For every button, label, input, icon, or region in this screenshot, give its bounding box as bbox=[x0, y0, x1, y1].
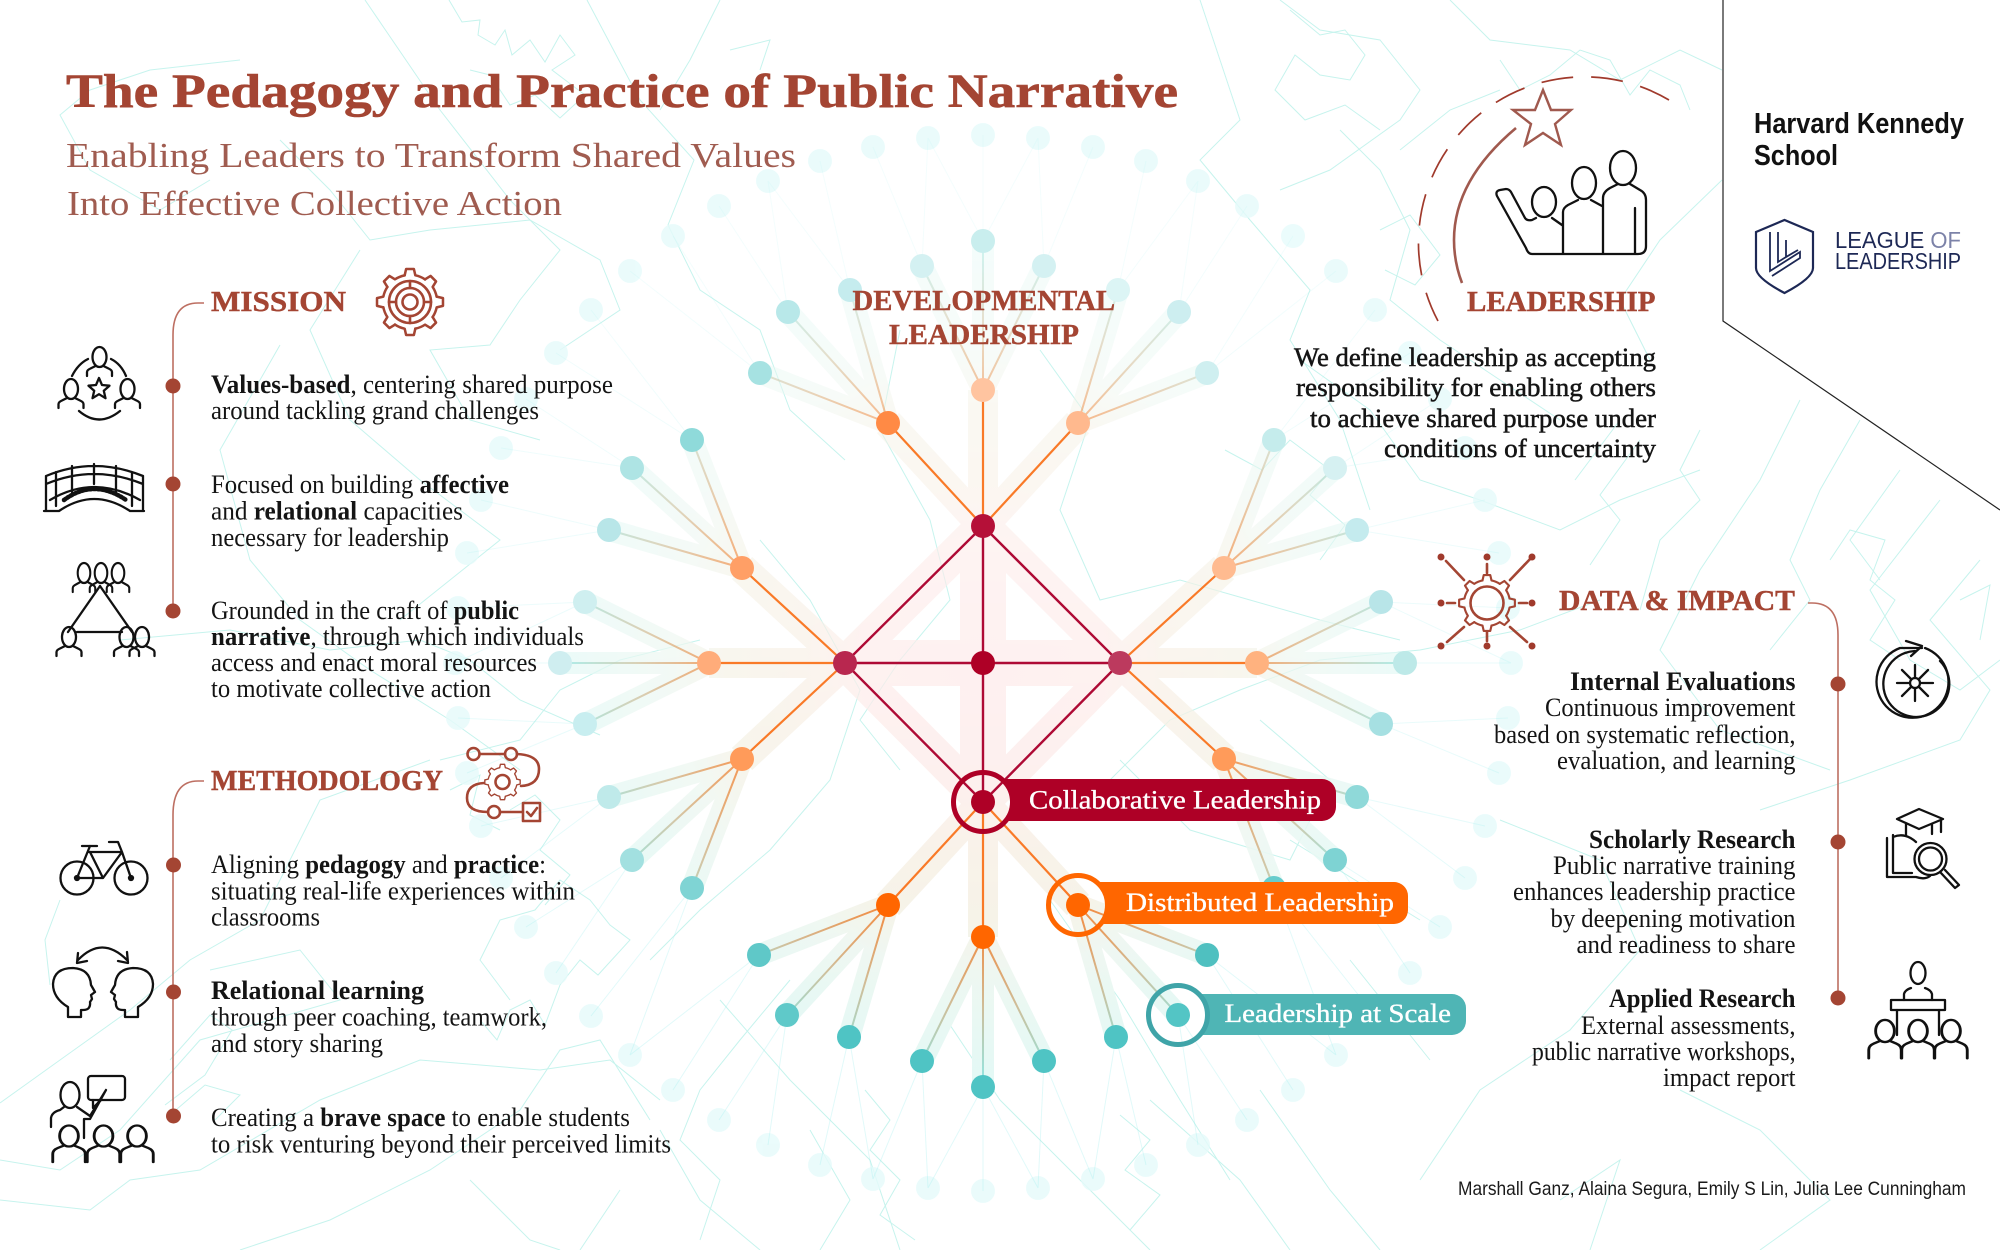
text: brave space bbox=[211, 1103, 671, 1158]
icon: teacher and students bbox=[51, 1076, 153, 1162]
panel: leadership bbox=[1294, 77, 1669, 463]
logo: League of Leadership: LEADERSHIP bbox=[1835, 248, 1961, 274]
text: internal evaluations: based on systematic reflection, bbox=[1494, 720, 1796, 749]
text: applied research: public narrative workshops, bbox=[1532, 1037, 1796, 1066]
heading: methodology: METHODOLOGY bbox=[211, 766, 443, 797]
panel: methodology bbox=[51, 748, 671, 1162]
icon: group of people bbox=[1496, 151, 1646, 254]
icon: process gear bbox=[467, 748, 540, 821]
text: leadership definition: conditions of uncertainty bbox=[1384, 434, 1656, 463]
text: scholarly research: by deepening motivation bbox=[1550, 904, 1796, 933]
legend pill: Distributed Leadership: Distributed Leadership bbox=[1126, 887, 1394, 917]
orange nodes bbox=[697, 378, 1269, 949]
pale bands bbox=[560, 241, 1405, 1087]
subtitle: Enabling Leaders to Transform Shared Values bbox=[66, 136, 796, 175]
legend pill: Collaborative Leadership: Collaborative Leadership bbox=[1029, 784, 1321, 814]
text: scholarly research: Public narrative training bbox=[1553, 851, 1796, 880]
red nodes bbox=[833, 514, 1132, 814]
text: public narrative: access and enact moral resources bbox=[211, 648, 537, 677]
heading: mission: MISSION bbox=[211, 287, 346, 318]
text: relational learning: Relational learning bbox=[211, 976, 424, 1005]
text: brave space: to risk venturing beyond their perceived limits bbox=[211, 1130, 671, 1158]
collaborative diamond connectors bbox=[845, 526, 1120, 802]
text: internal evaluations: Continuous improvement bbox=[1545, 693, 1796, 722]
text: scholarly research: enhances leadership practice bbox=[1513, 877, 1796, 906]
text: leadership definition: responsibility for enabling others bbox=[1296, 373, 1656, 402]
legend pill: Distributed Leadership bbox=[1048, 876, 1408, 934]
faint connectors to the outer ring bbox=[455, 135, 1511, 1191]
text: applied research: Applied Research bbox=[1609, 984, 1796, 1013]
text: applied research: impact report bbox=[1663, 1063, 1796, 1092]
icon: target gear bbox=[376, 268, 444, 336]
text: internal evaluations: Internal Evaluations bbox=[1570, 667, 1796, 696]
heading: leadership: LEADERSHIP bbox=[1467, 287, 1656, 318]
text: internal evaluations bbox=[1494, 667, 1796, 775]
text: pedagogy and practice: situating real-life experiences within bbox=[211, 876, 575, 906]
icon: team circle with star bbox=[58, 347, 140, 420]
heading: developmental leadership bbox=[852, 286, 1115, 351]
text: scholarly research bbox=[1513, 825, 1796, 959]
heading: developmental leadership: DEVELOPMENTAL bbox=[852, 286, 1115, 317]
icon: graduation cap, book and magnifier bbox=[1887, 809, 1959, 888]
radial network diagram bbox=[455, 135, 1511, 1191]
icon: cycle with sun bbox=[1876, 641, 1949, 718]
logo: League of Leadership: LEAGUE OF bbox=[1835, 227, 1961, 253]
outer teal nodes bbox=[548, 229, 1417, 1099]
subtitle: Into Effective Collective Action bbox=[67, 184, 562, 223]
text: pedagogy and practice: classrooms bbox=[211, 902, 320, 932]
text: public narrative: narrative, through which individuals bbox=[211, 622, 584, 651]
icon: two heads exchanging bbox=[53, 948, 153, 1017]
methodology timeline bbox=[166, 781, 204, 1124]
heading: data and impact: DATA & IMPACT bbox=[1559, 586, 1795, 617]
heading: developmental leadership: LEADERSHIP bbox=[889, 320, 1079, 351]
icon: bridge bbox=[44, 464, 144, 511]
logo: Harvard Kennedy School bbox=[1754, 108, 1964, 172]
text: leadership definition: to achieve shared purpose under bbox=[1310, 404, 1656, 433]
text: relational learning: through peer coaching, teamwork, bbox=[211, 1002, 547, 1032]
text: public narrative: to motivate collective action bbox=[211, 674, 491, 703]
icon: lecturer and audience bbox=[1869, 962, 1967, 1058]
legend pill: Leadership at Scale bbox=[1148, 986, 1466, 1044]
text: relational learning: and story sharing bbox=[211, 1029, 383, 1058]
text: pedagogy and practice: Aligning pedagogy and practice: bbox=[211, 850, 546, 879]
icon: dashed arc and star bbox=[1418, 77, 1669, 321]
legend pill: Collaborative Leadership bbox=[954, 772, 1336, 832]
text: affective capacities: Focused on building affective bbox=[211, 470, 509, 499]
red to orange connectors bbox=[709, 390, 1257, 937]
subtitle bbox=[66, 136, 796, 223]
icon: data gear with spokes bbox=[1438, 554, 1536, 650]
logo panel background bbox=[1723, 0, 2000, 510]
mission timeline bbox=[166, 303, 204, 618]
orange to teal connectors bbox=[560, 241, 1405, 1087]
text: relational learning bbox=[211, 976, 547, 1058]
logo: Harvard Kennedy School: School bbox=[1754, 140, 1838, 172]
panel: data and impact bbox=[1438, 554, 1967, 1092]
text: brave space: Creating a brave space to enable students bbox=[211, 1103, 630, 1132]
text: values-based: around tackling grand challenges bbox=[211, 396, 539, 425]
panel: mission bbox=[44, 268, 613, 703]
text: public narrative: Grounded in the craft of public bbox=[211, 596, 519, 625]
text: affective capacities: necessary for leadership bbox=[211, 523, 449, 552]
text: affective capacities: and relational capacities bbox=[211, 496, 463, 526]
icon: triangle of people bbox=[56, 563, 154, 656]
text: scholarly research: Scholarly Research bbox=[1589, 825, 1796, 854]
text: values-based: Values-based, centering shared purpose bbox=[211, 370, 613, 399]
data timeline bbox=[1808, 603, 1846, 1006]
text: leadership definition bbox=[1294, 343, 1656, 463]
logo: League of Leadership bbox=[1756, 220, 1961, 293]
decorative faint outer ring of dots bbox=[443, 123, 1523, 1203]
text: applied research bbox=[1532, 984, 1796, 1092]
title: The Pedagogy and Practice of Public Narrative bbox=[66, 65, 1178, 118]
text: public narrative bbox=[211, 596, 584, 703]
logo: Harvard Kennedy School: Harvard Kennedy bbox=[1754, 108, 1964, 140]
text: affective capacities bbox=[211, 470, 509, 552]
icon: bicycle bbox=[60, 842, 148, 894]
legend pill: Leadership at Scale: Leadership at Scale bbox=[1224, 998, 1451, 1028]
text: internal evaluations: evaluation, and learning bbox=[1557, 746, 1796, 775]
text: scholarly research: and readiness to share bbox=[1576, 930, 1796, 959]
text: values-based bbox=[211, 370, 613, 425]
text: leadership definition: We define leadership as accepting bbox=[1294, 343, 1656, 372]
text: pedagogy and practice bbox=[211, 850, 575, 932]
text: applied research: External assessments, bbox=[1581, 1011, 1796, 1040]
